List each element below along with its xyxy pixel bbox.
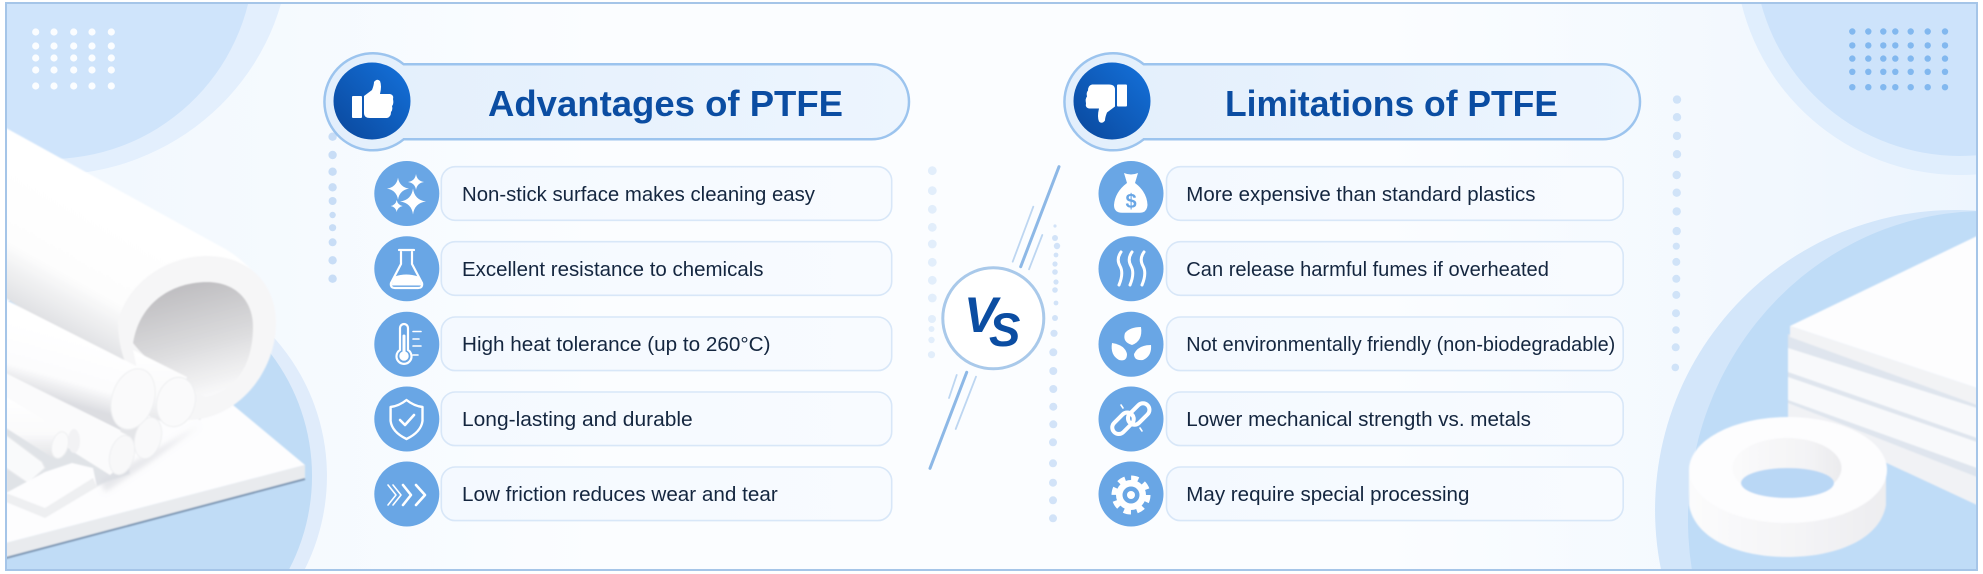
icon: chevrons (388, 485, 425, 505)
panel: advantages (324, 53, 909, 527)
dot column: right of limitations (1672, 95, 1681, 371)
label: More expensive than standard plastics (1186, 183, 1536, 206)
label: Low friction reduces wear and tear (462, 483, 778, 506)
dots: top-right pattern (1849, 28, 1948, 90)
icon: leaves (1112, 327, 1151, 360)
item: expensive (1098, 161, 1623, 226)
illustration: PTFE tube, rods and sheet (6, 128, 305, 558)
icon: thermometer (397, 324, 421, 364)
label: Not environmentally friendly (non-biodegradable) (1186, 333, 1615, 356)
icon: gear (1114, 478, 1148, 512)
heading banner: advantages (324, 53, 909, 150)
dot column: left of VS (928, 166, 937, 358)
heading: advantages of PTFE: Advantages of PTFE (488, 83, 843, 124)
VS text: S (989, 303, 1020, 356)
label: High heat tolerance (up to 260°C) (462, 333, 770, 356)
icon: shield (391, 400, 422, 439)
item: mechanical strength (1098, 386, 1623, 452)
dot column: left of advantages (328, 132, 337, 283)
icon: flask (391, 250, 422, 288)
icon: fumes (1118, 252, 1145, 285)
label: May require special processing (1186, 483, 1469, 506)
icon: broken chain (1110, 401, 1152, 437)
item: durable (374, 386, 892, 452)
item: chemicals (374, 236, 892, 301)
icon: sparkles (387, 174, 426, 214)
VS text: V (964, 287, 1001, 343)
panel: limitations (1064, 53, 1640, 527)
item: heat (374, 312, 892, 377)
icon: thumbs up (334, 62, 410, 140)
label: Non-stick surface makes cleaning easy (462, 183, 816, 206)
label: Long-lasting and durable (462, 408, 693, 431)
heading: limitations of PTFE: Limitations of PTFE (1225, 83, 1558, 124)
item: processing (1098, 462, 1623, 526)
icon: thumbs down (1074, 62, 1150, 140)
icon: money bag: $ (1125, 191, 1137, 213)
label: Lower mechanical strength vs. metals (1186, 408, 1531, 431)
label: Excellent resistance to chemicals (462, 258, 764, 281)
item: low friction (374, 462, 892, 526)
dot column: right of VS (1049, 224, 1060, 522)
item: fumes (1098, 236, 1623, 301)
item: environment (1098, 312, 1623, 377)
illustration: PTFE sheets and ring (1689, 236, 1977, 557)
heading banner: limitations (1064, 53, 1640, 150)
dots: top-left pattern (32, 28, 115, 90)
item: non-stick (374, 161, 892, 226)
VS badge and lines (930, 167, 1059, 468)
icon: money bag (1114, 173, 1148, 213)
label: Can release harmful fumes if overheated (1186, 258, 1549, 281)
